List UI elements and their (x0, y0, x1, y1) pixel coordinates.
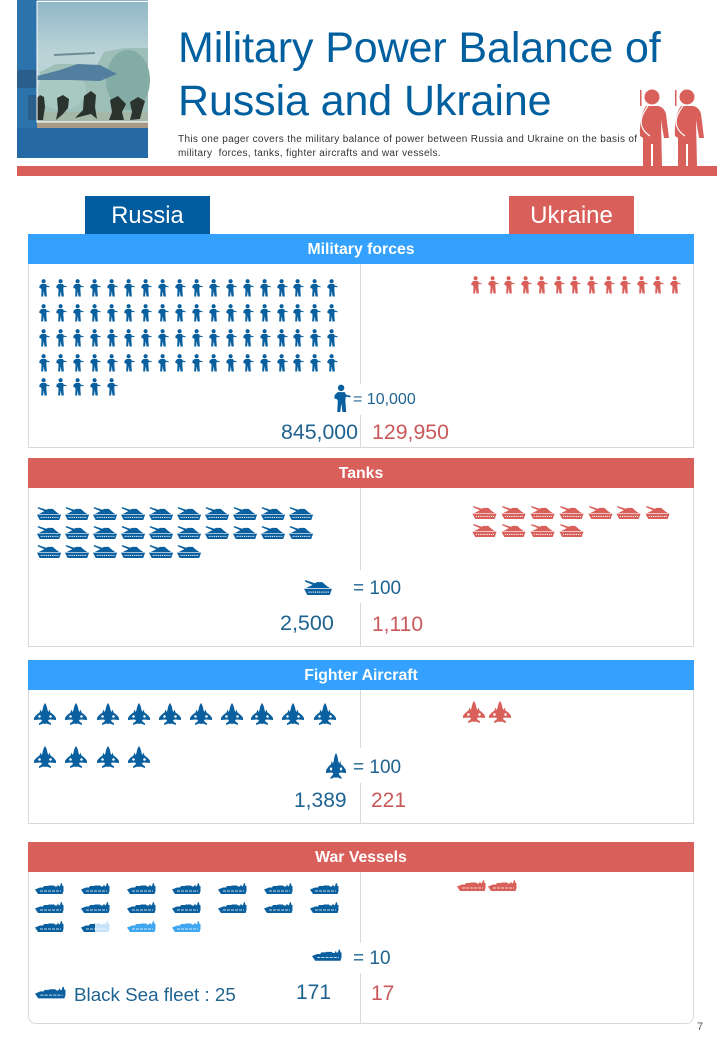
panel: military forces (28, 234, 694, 448)
divider (360, 690, 361, 823)
tab: Ukraine: Ukraine (530, 202, 613, 229)
description text: military forces, tanks, fighter aircrafts and war vessels. (178, 148, 441, 158)
title: Russia and Ukraine (178, 76, 551, 124)
legend: aircraft = 100: = 100 (353, 757, 401, 778)
description text (178, 134, 638, 158)
value: Russia vessels: 171 (296, 981, 331, 1004)
divider (360, 264, 361, 447)
heading: fighter aircraft (28, 660, 694, 690)
legend: soldier = 10,000: = 10,000 (353, 391, 416, 408)
panel: war vessels (28, 842, 694, 1024)
header photo: helicopter and soldiers (17, 0, 150, 158)
legend: vessel = 10 (312, 943, 391, 973)
panel: tanks (28, 458, 694, 647)
red header bar (17, 166, 717, 176)
description text: This one pager covers the military balance of power between Russia and Ukraine on the basis of (178, 134, 637, 145)
value: Ukraine vessels: 17 (371, 982, 394, 1005)
value: Russia tanks: 2,500 (280, 611, 334, 635)
heading: military forces: Military forces (307, 241, 415, 258)
legend: soldier = 10,000 (334, 384, 416, 415)
heading: war vessels: War Vessels (315, 849, 407, 866)
divider (360, 488, 361, 646)
value: Ukraine tanks: 1,110 (372, 613, 423, 636)
note: Black Sea fleet: Black Sea fleet : 25 (74, 984, 236, 1005)
heading: tanks (28, 458, 694, 488)
heading: military forces (28, 234, 694, 264)
legend: vessel = 10: = 10 (353, 948, 391, 969)
title (178, 24, 661, 124)
tab: Ukraine (509, 196, 634, 234)
legend: tank = 100 (304, 570, 401, 603)
title: Military Power Balance of (178, 24, 661, 72)
value: Ukraine aircraft: 221 (371, 789, 406, 812)
Russia vessel pictogram (35, 883, 338, 932)
heading: fighter aircraft: Fighter Aircraft (304, 667, 418, 684)
tab: Russia (85, 196, 210, 234)
divider (360, 872, 361, 1023)
tab: Russia: Russia (111, 203, 184, 229)
legend: aircraft = 100 (326, 748, 401, 783)
heading: tanks: Tanks (339, 465, 383, 482)
panel: fighter aircraft (28, 660, 694, 824)
value: Russia aircraft: 1,389 (294, 789, 347, 812)
legend: tank = 100: = 100 (353, 578, 401, 599)
value: Russia forces: 845,000 (281, 420, 358, 444)
value: Ukraine forces: 129,950 (372, 420, 449, 444)
icon: two soldiers (640, 90, 704, 166)
page number: 7 (697, 1021, 703, 1033)
heading: war vessels (28, 842, 694, 872)
